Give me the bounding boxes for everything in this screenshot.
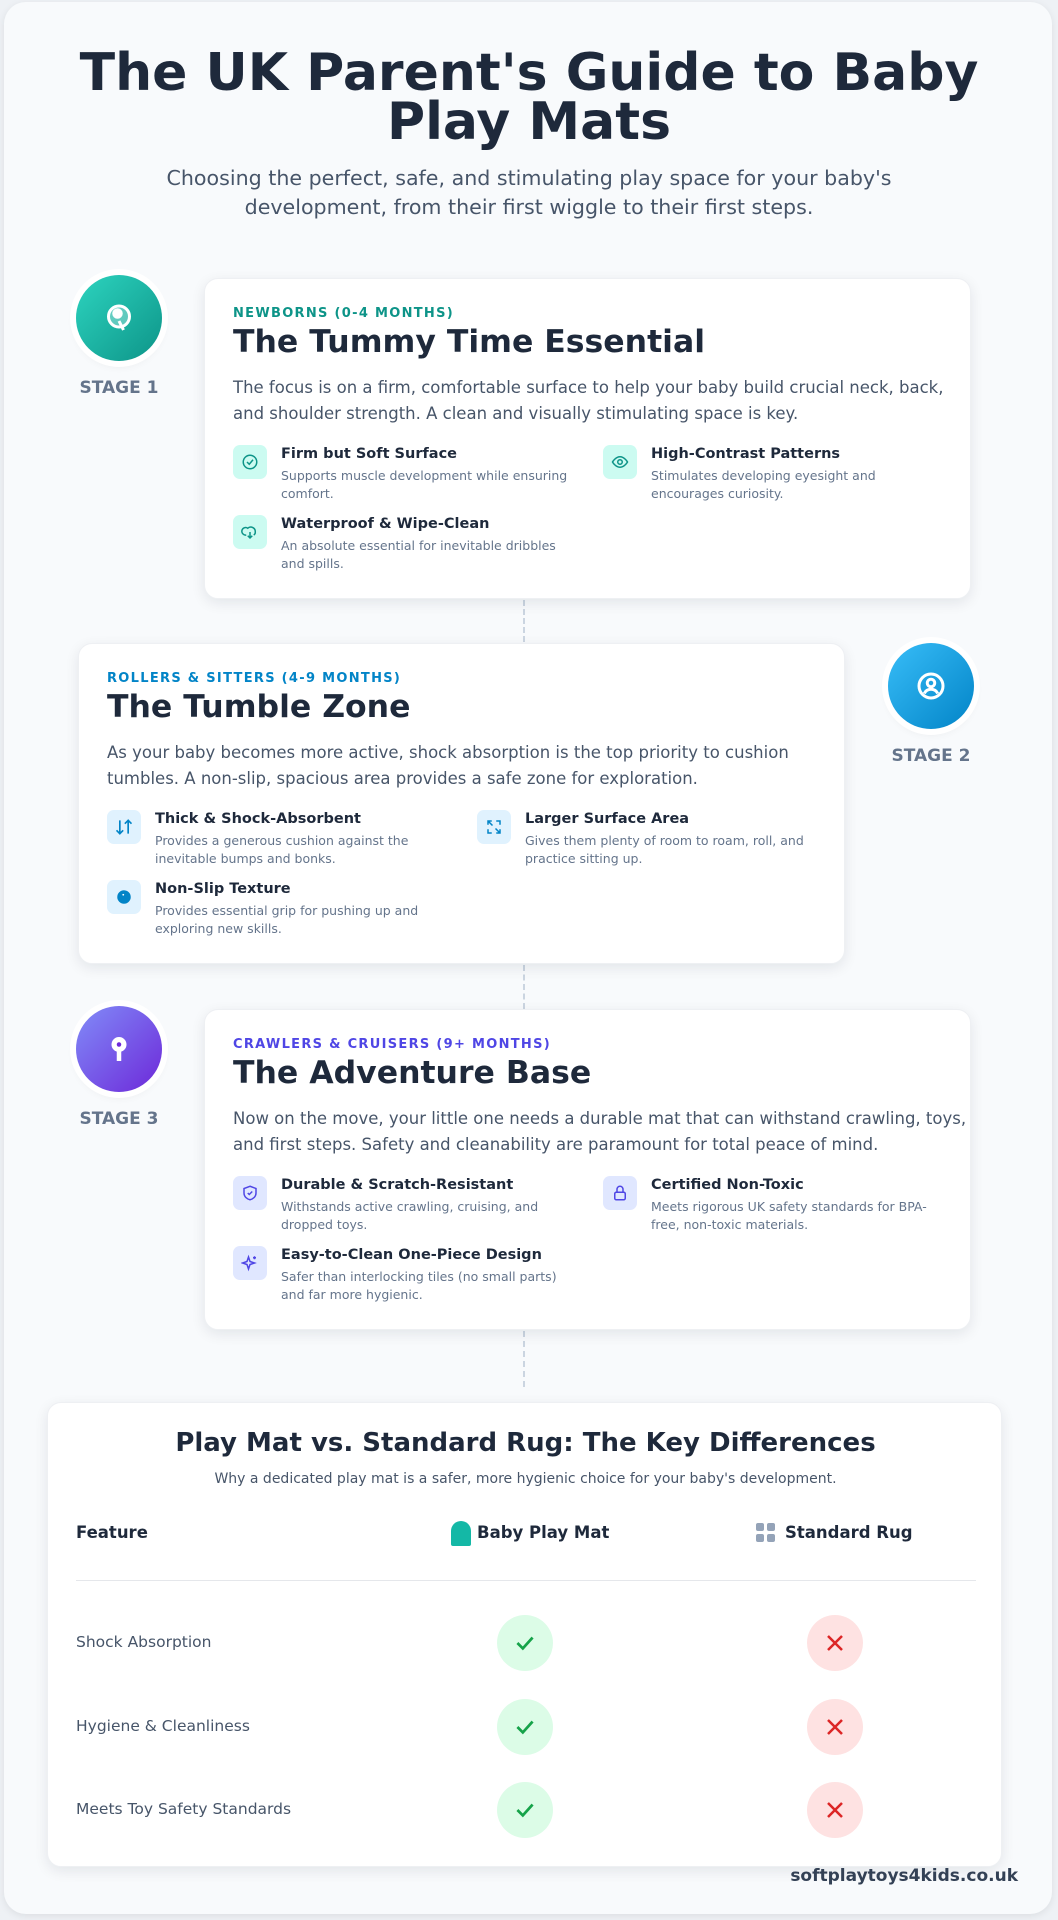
table header: Baby Play Mat <box>477 1523 609 1542</box>
feature: non-slip: Provides essential grip for pushing up and exploring new skills. <box>155 903 418 936</box>
stage 2 label: STAGE 2 <box>892 746 970 766</box>
icon: rug <box>756 1523 775 1542</box>
comparison subtitle: Why a dedicated play mat is a safer, more hygienic choice for your baby's development. <box>214 1471 837 1487</box>
feature: durable <box>233 1176 538 1232</box>
subtitle: Choosing the perfect, safe, and stimulating play space for your baby's development, from their first wiggle to their first steps. <box>166 166 891 219</box>
table header: Feature <box>76 1523 148 1542</box>
feature: high contrast: High-Contrast Patterns <box>651 446 840 462</box>
panel: stage 3 card <box>204 1009 971 1330</box>
feature: waterproof: An absolute essential for inevitable dribbles and spills. <box>281 538 556 571</box>
comparison heading: Play Mat vs. Standard Rug: The Key Differences <box>175 1428 876 1458</box>
feature: durable: Durable & Scratch-Resistant <box>281 1177 513 1193</box>
feature: high contrast: Stimulates developing eyesight and encourages curiosity. <box>651 468 876 501</box>
stage 1 label: STAGE 1 <box>80 378 158 398</box>
connector line 3 <box>523 1331 525 1387</box>
title <box>80 43 978 152</box>
icon: stage 2 baby <box>888 643 974 729</box>
title: Play Mats <box>387 92 671 152</box>
panel: comparison table <box>47 1402 1002 1867</box>
icon: stage 1 baby <box>76 275 162 361</box>
feature: easy clean <box>233 1246 557 1302</box>
row: safety standards <box>76 1782 863 1838</box>
feature: non-toxic: Certified Non-Toxic <box>651 1177 804 1193</box>
stage 3 heading: The Adventure Base <box>233 1055 591 1091</box>
feature: firm surface <box>233 445 567 501</box>
footer: website: softplaytoys4kids.co.uk <box>790 1866 1018 1886</box>
feature: easy clean: Safer than interlocking tiles (no small parts) and far more hygienic. <box>281 1269 557 1302</box>
feature: larger area: Gives them plenty of room to roam, roll, and practice sitting up. <box>525 833 804 866</box>
panel: stage 1 card <box>204 278 971 599</box>
stage 2 marker <box>888 643 974 766</box>
stage 3 text: Now on the move, your little one needs a durable mat that can withstand crawling, toys, and first steps. Safety and cleanability are paramount for total peace of mind. <box>233 1109 966 1154</box>
stage 2 text: As your baby becomes more active, shock absorption is the top priority to cushion tumbles. A non-slip, spacious area provides a safe zone for exploration. <box>107 743 789 788</box>
feature: non-slip <box>107 880 418 936</box>
stage 2 heading: The Tumble Zone <box>107 689 410 725</box>
title: The UK Parent's Guide to Baby <box>80 43 978 103</box>
feature: thick <box>107 810 408 866</box>
feature: waterproof <box>233 515 556 571</box>
feature: waterproof: Waterproof & Wipe-Clean <box>281 516 489 532</box>
stage 1 heading: The Tummy Time Essential <box>233 324 705 360</box>
stage 1 text: The focus is on a firm, comfortable surface to help your baby build crucial neck, back, and shoulder strength. A clean and visually stimulating space is key. <box>233 378 943 423</box>
connector line 2 <box>523 965 525 1009</box>
stage 1 age label: NEWBORNS (0-4 MONTHS) <box>233 306 454 321</box>
panel: stage 2 card <box>78 643 845 964</box>
feature: high contrast <box>603 445 876 501</box>
feature: firm surface: Supports muscle development while ensuring comfort. <box>281 468 567 501</box>
row: hygiene <box>76 1699 863 1755</box>
stage 2 age label: ROLLERS & SITTERS (4-9 MONTHS) <box>107 671 401 686</box>
connector line 1 <box>523 600 525 642</box>
icon: play mat <box>451 1521 471 1546</box>
stage 3 marker <box>76 1006 162 1129</box>
feature: thick: Provides a generous cushion against the inevitable bumps and bonks. <box>155 833 408 866</box>
feature: non-toxic <box>603 1176 927 1232</box>
feature: firm surface: Firm but Soft Surface <box>281 446 457 462</box>
table header <box>76 1521 913 1546</box>
row: shock absorption: Shock Absorption <box>76 1633 211 1651</box>
row: shock absorption <box>76 1615 863 1671</box>
feature: larger area: Larger Surface Area <box>525 811 689 827</box>
feature: easy clean: Easy-to-Clean One-Piece Design <box>281 1247 542 1263</box>
stage 1 marker <box>76 275 162 398</box>
stage 3 label: STAGE 3 <box>80 1109 158 1129</box>
feature: larger area <box>477 810 804 866</box>
icon: stage 3 <box>76 1006 162 1092</box>
feature: non-slip: Non-Slip Texture <box>155 881 291 897</box>
table header: Standard Rug <box>785 1523 913 1542</box>
row: safety standards: Meets Toy Safety Standards <box>76 1800 291 1818</box>
feature: durable: Withstands active crawling, cruising, and dropped toys. <box>281 1199 538 1232</box>
feature: non-toxic: Meets rigorous UK safety standards for BPA-free, non-toxic materials. <box>651 1199 927 1232</box>
row: hygiene: Hygiene & Cleanliness <box>76 1717 250 1735</box>
stage 3 age label: CRAWLERS & CRUISERS (9+ MONTHS) <box>233 1037 551 1052</box>
feature: thick: Thick & Shock-Absorbent <box>155 811 361 827</box>
